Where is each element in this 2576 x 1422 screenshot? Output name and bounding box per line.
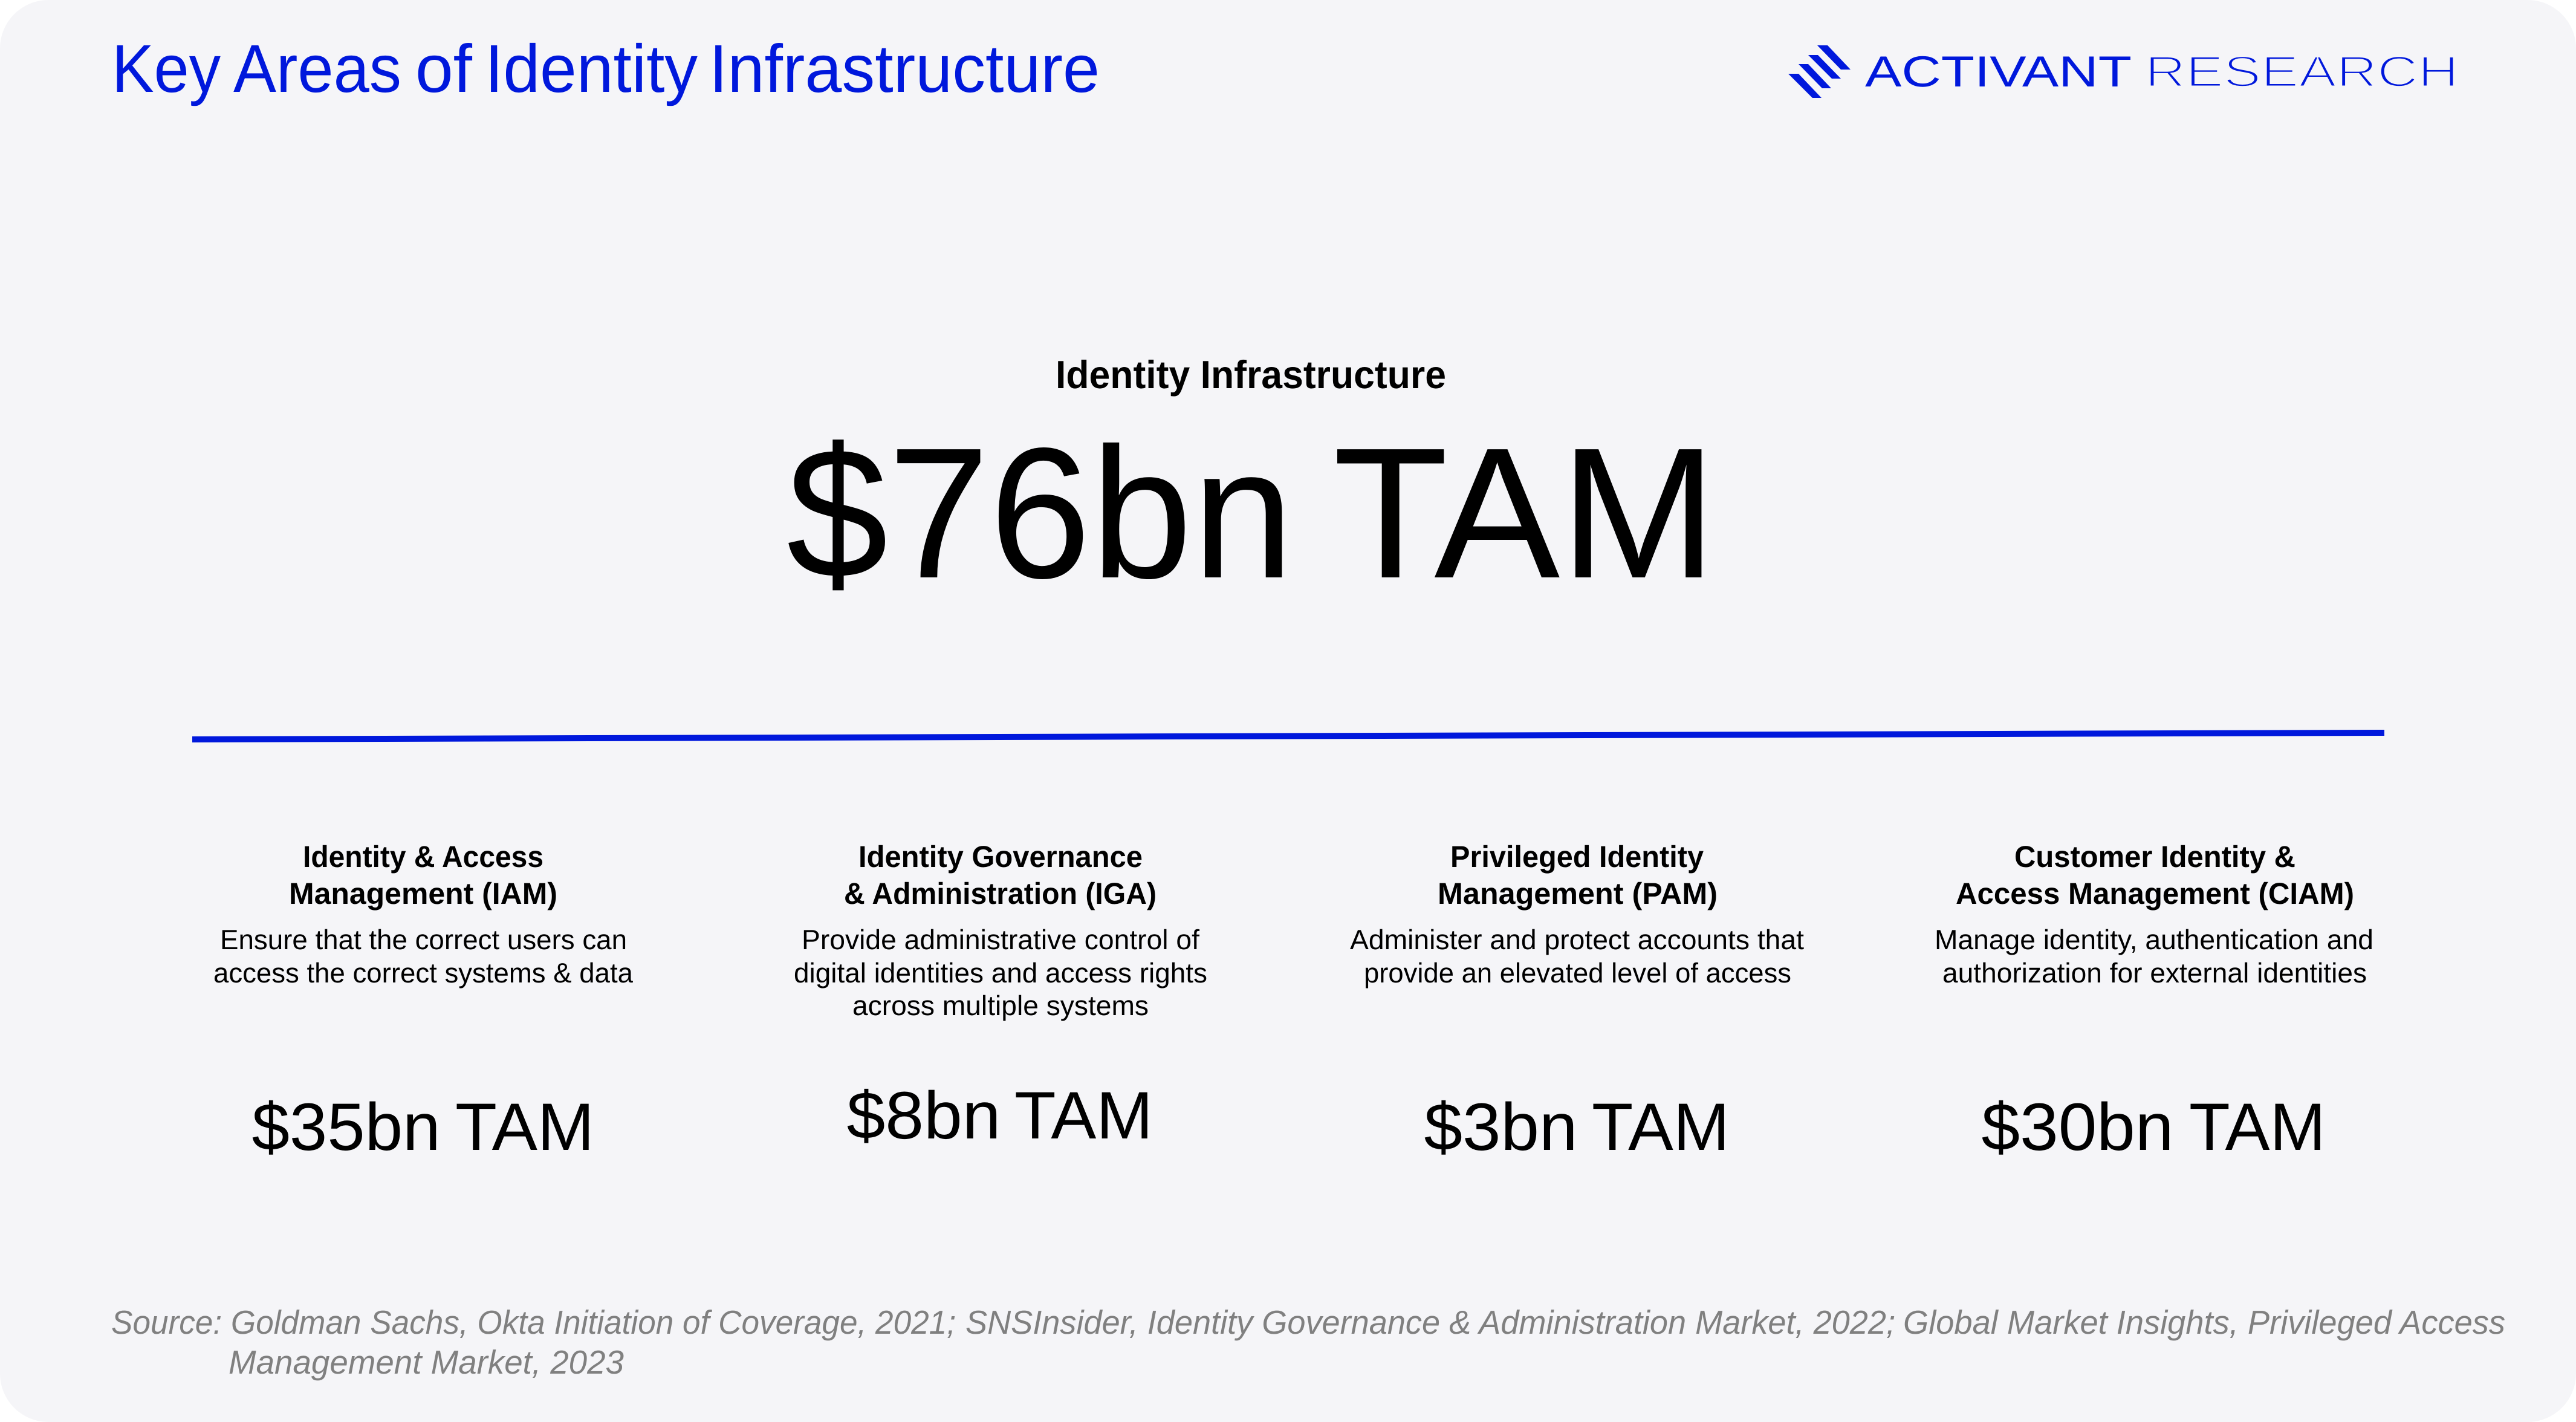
- TAM value: $30bn: [1982, 1089, 2174, 1164]
- panel heading: [1438, 840, 1718, 911]
- panel: Privileged Identity Management: [1350, 840, 1804, 1164]
- panel heading: Privileged Identity: [1450, 840, 1704, 874]
- panel description: Ensure that the correct users can: [220, 924, 627, 955]
- TAM value: $35bn: [251, 1089, 440, 1164]
- total TAM figure: [787, 409, 1717, 617]
- divider line: [192, 730, 2384, 742]
- panel description: Administer and protect accounts that: [1350, 924, 1804, 955]
- logo wordmark: ACTIVANT: ACTIVANT: [1865, 48, 2132, 96]
- panel: Identity & Access Management: [213, 840, 633, 1164]
- TAM value: TAM: [1592, 1089, 1730, 1164]
- TAM value: TAM: [2189, 1089, 2326, 1164]
- panel: Identity Governance & Administration: [794, 840, 1207, 1153]
- panel: Customer Identity & Access Management: [1935, 840, 2373, 1164]
- title: [112, 31, 1100, 106]
- source footnote: Source: Goldman Sachs, Okta Initiation of Coverage, 2021;: [111, 1304, 956, 1341]
- total TAM figure: TAM: [1333, 409, 1717, 617]
- total TAM figure: $76bn: [787, 409, 1294, 617]
- title: Identity: [485, 31, 698, 106]
- panel description: Provide administrative control of: [802, 924, 1199, 955]
- source footnote: [111, 1304, 2505, 1381]
- panel heading: Management (IAM): [289, 877, 557, 911]
- icon: logo stripes: [1788, 45, 1851, 98]
- panel heading: Identity & Access: [303, 840, 543, 874]
- title: Infrastructure: [709, 31, 1100, 106]
- panel description: across multiple systems: [852, 990, 1149, 1021]
- panel description: access the correct systems & data: [213, 957, 633, 989]
- panel heading: & Administration (IGA): [844, 877, 1157, 911]
- TAM value: [251, 1089, 594, 1164]
- source footnote: SNSInsider, Identity Governance & Administration Market, 2022;: [965, 1304, 1895, 1341]
- title: of: [415, 31, 473, 106]
- title: Key: [112, 31, 221, 106]
- TAM value: TAM: [1014, 1078, 1153, 1153]
- logo wordmark: RESEARCH: RESEARCH: [2145, 48, 2459, 96]
- TAM value: [1424, 1089, 1730, 1164]
- panel description: digital identities and access rights: [794, 957, 1207, 989]
- panel description: [1350, 924, 1804, 989]
- title: Areas: [233, 31, 401, 106]
- panel description: Manage identity, authentication and: [1935, 924, 2373, 955]
- source footnote: Management Market, 2023: [229, 1343, 624, 1381]
- panel description: [794, 924, 1207, 1021]
- heading: Identity Infrastructure: Identity Infrastructure: [1056, 352, 1446, 397]
- source footnote: Global Market Insights, Privileged Access: [1903, 1304, 2505, 1341]
- panel heading: [844, 840, 1157, 911]
- panel heading: [1956, 840, 2354, 911]
- panel heading: Management (PAM): [1438, 877, 1718, 911]
- panel heading: Identity Governance: [858, 840, 1143, 874]
- TAM value: TAM: [455, 1089, 594, 1164]
- TAM value: [846, 1078, 1153, 1153]
- panel heading: Customer Identity &: [2014, 840, 2295, 874]
- TAM value: $3bn: [1424, 1089, 1578, 1164]
- TAM value: [1982, 1089, 2326, 1164]
- panel description: provide an elevated level of access: [1364, 957, 1791, 989]
- panel description: [213, 924, 633, 989]
- panel heading: [289, 840, 557, 911]
- logo: Activant Research: [1788, 45, 2459, 98]
- panel heading: Access Management (CIAM): [1956, 877, 2354, 911]
- panel description: [1935, 924, 2373, 989]
- TAM value: $8bn: [846, 1078, 1001, 1153]
- panel description: authorization for external identities: [1942, 957, 2367, 989]
